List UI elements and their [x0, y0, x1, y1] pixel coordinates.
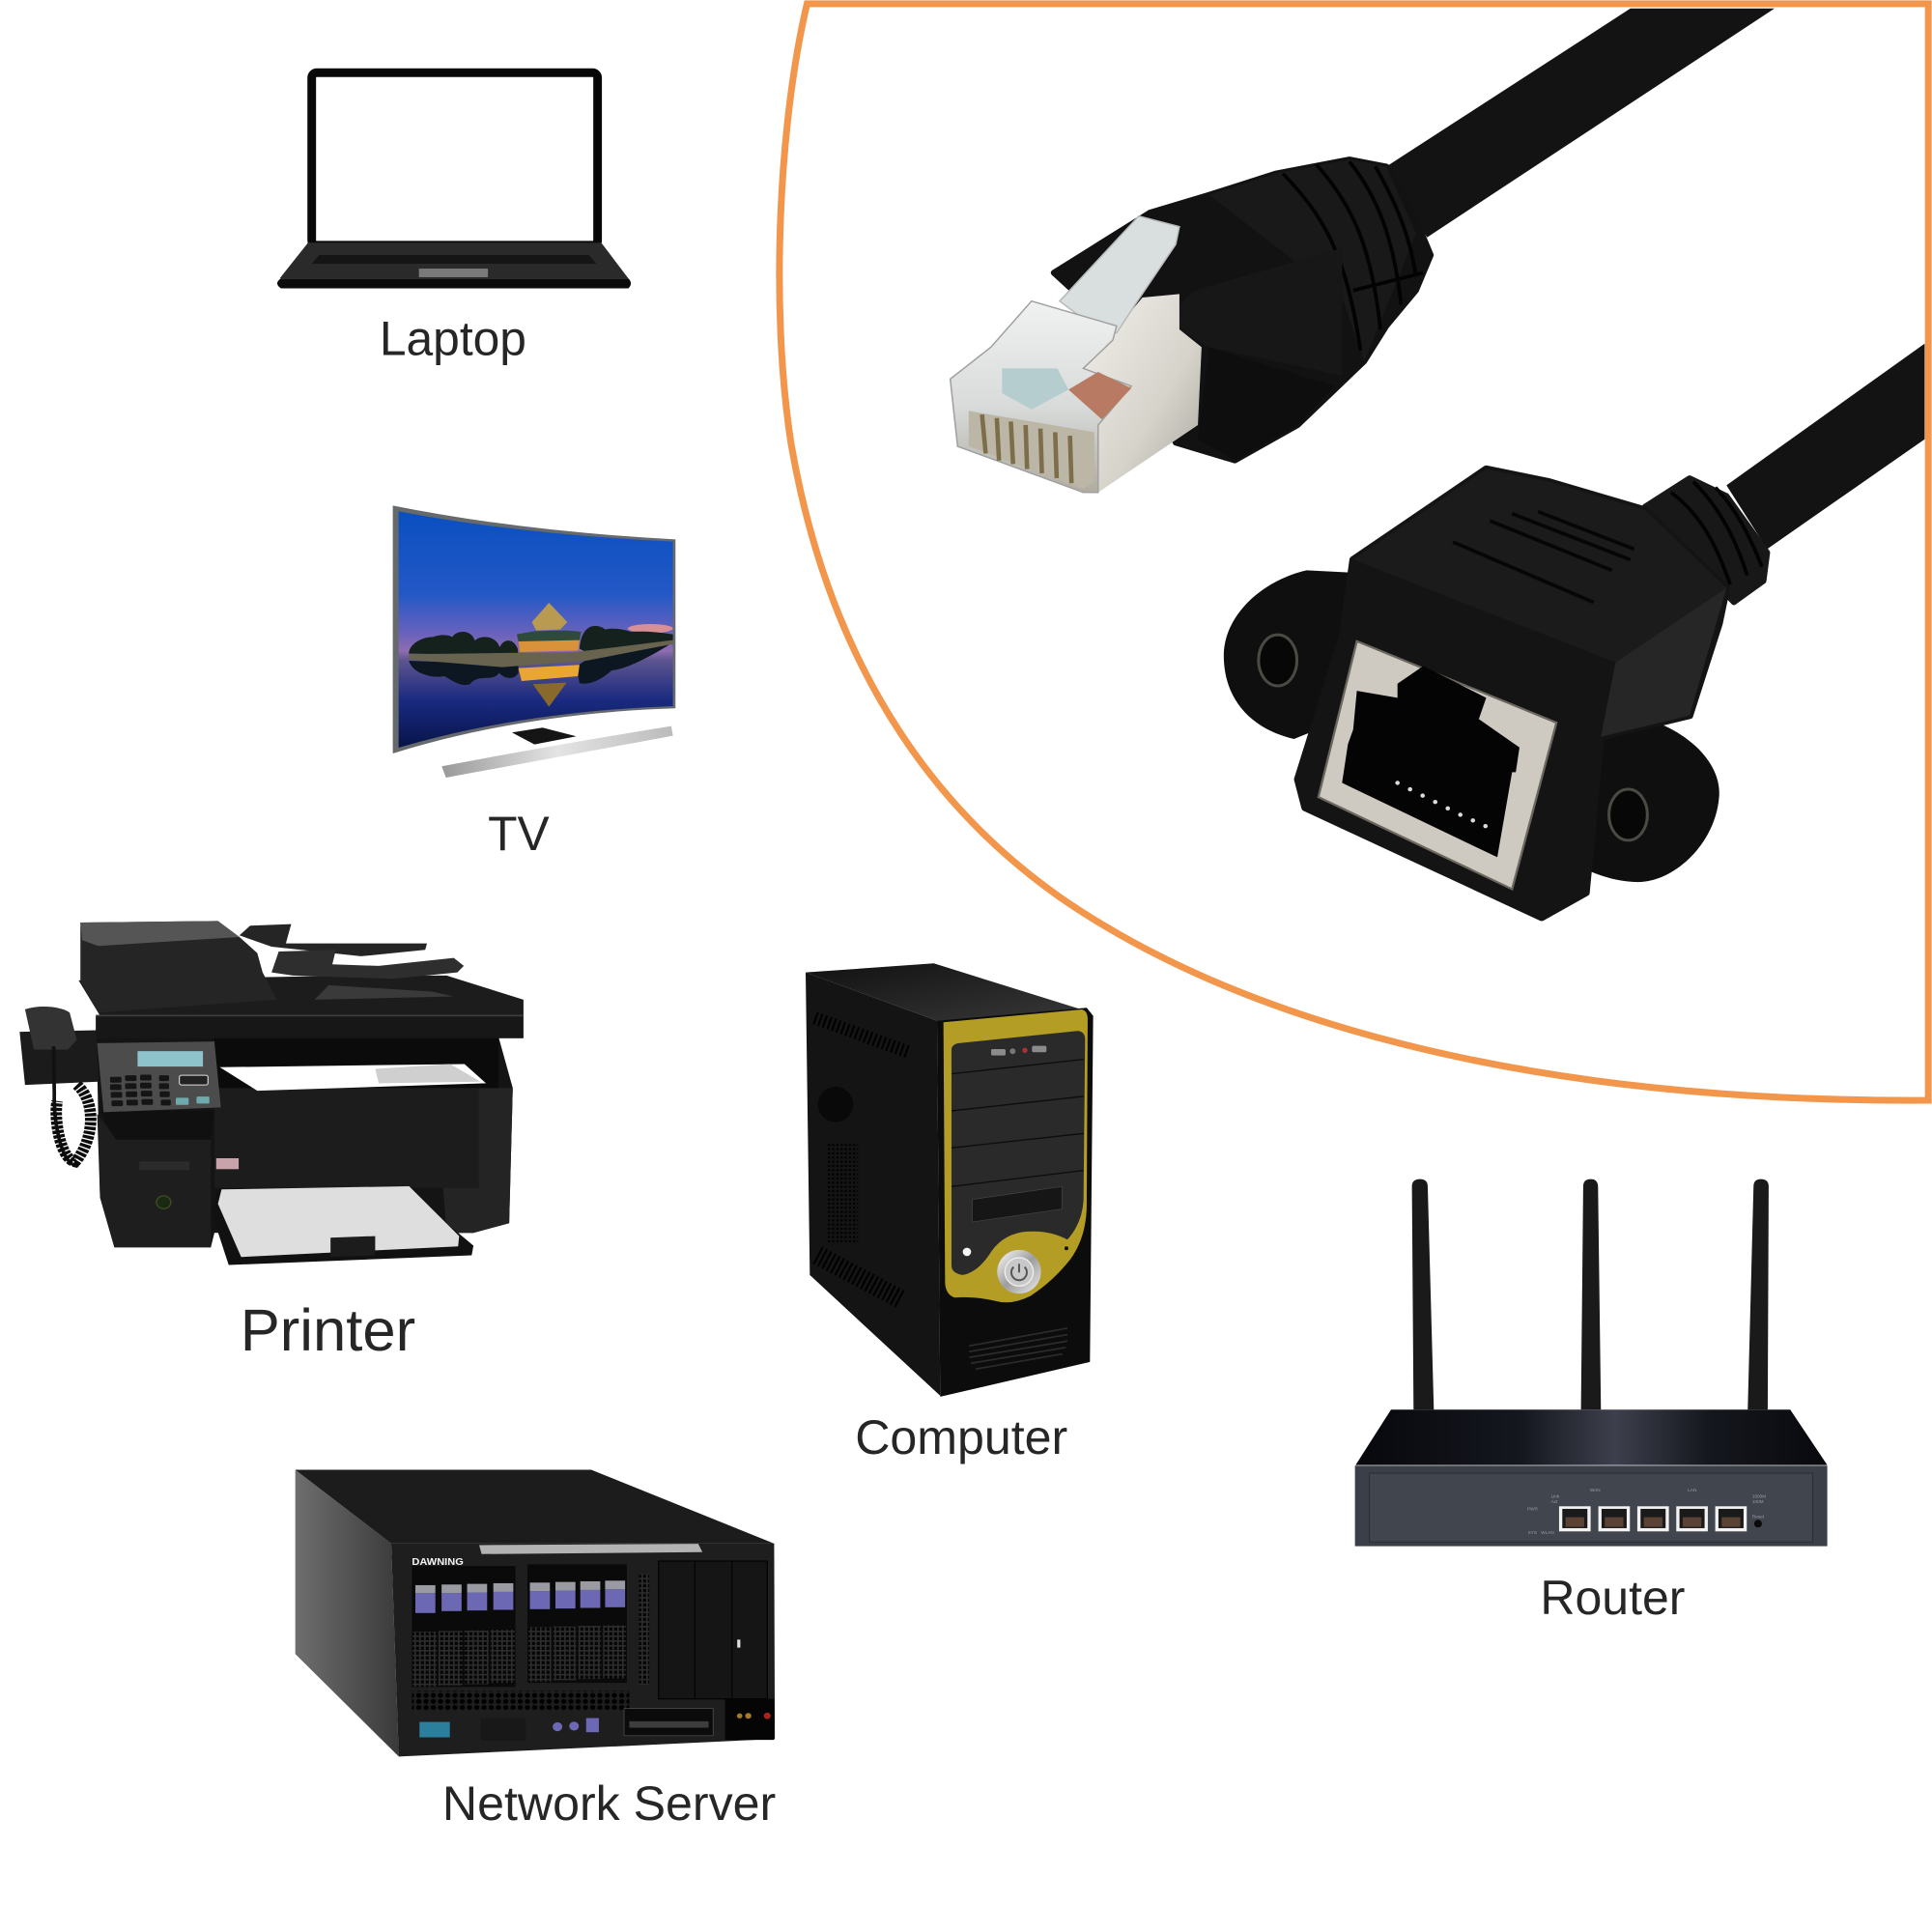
- drive bays: [412, 1564, 627, 1687]
- icon: curved TV: [393, 505, 675, 778]
- router panel labels: LAN: [1688, 1488, 1696, 1492]
- icon: desktop tower: [806, 963, 1094, 1397]
- icon: laptop: [277, 72, 631, 288]
- TV scene: trees, island and reflection: [409, 603, 673, 707]
- router panel labels: Act: [1551, 1499, 1558, 1504]
- device: router: [1355, 1179, 1828, 1625]
- label: Network Server: Network Server: [442, 1776, 776, 1831]
- device: computer: [806, 963, 1094, 1464]
- orange rounded panel outline: [780, 4, 1928, 1100]
- RJ45 male plug: [951, 9, 1775, 493]
- device: TV: [393, 505, 675, 861]
- label: Printer: Printer: [241, 1297, 415, 1364]
- router panel labels: 100M: [1752, 1499, 1764, 1504]
- label: TV: TV: [488, 807, 550, 861]
- brand label: DAWNING: [412, 1556, 464, 1568]
- router panel labels: WLAN: [1541, 1530, 1554, 1535]
- router panel labels: 1000M: [1752, 1494, 1766, 1499]
- antennas: [1412, 1179, 1769, 1409]
- router panel labels: [1527, 1488, 1766, 1535]
- panel: cable close-up with orange outline: [780, 4, 1928, 1100]
- icon: multifunction printer: [19, 921, 524, 1265]
- router panel labels: SYS: [1528, 1530, 1537, 1535]
- icon: wireless router: [1355, 1179, 1828, 1547]
- device: printer: [19, 921, 524, 1364]
- label: Router: Router: [1540, 1571, 1685, 1625]
- label: Laptop: Laptop: [380, 311, 526, 365]
- router panel labels: WAN: [1590, 1488, 1601, 1492]
- device: laptop: [277, 72, 631, 365]
- router panel labels: Link: [1551, 1494, 1560, 1499]
- label: Computer: Computer: [855, 1410, 1067, 1464]
- router panel labels: Reset: [1752, 1514, 1765, 1519]
- ethernet ports: [1559, 1506, 1747, 1531]
- router panel labels: PWR: [1527, 1506, 1538, 1511]
- device: network server: [296, 1470, 776, 1831]
- RJ45 female panel-mount socket: [1224, 344, 1924, 918]
- icon: rack server: [296, 1470, 775, 1756]
